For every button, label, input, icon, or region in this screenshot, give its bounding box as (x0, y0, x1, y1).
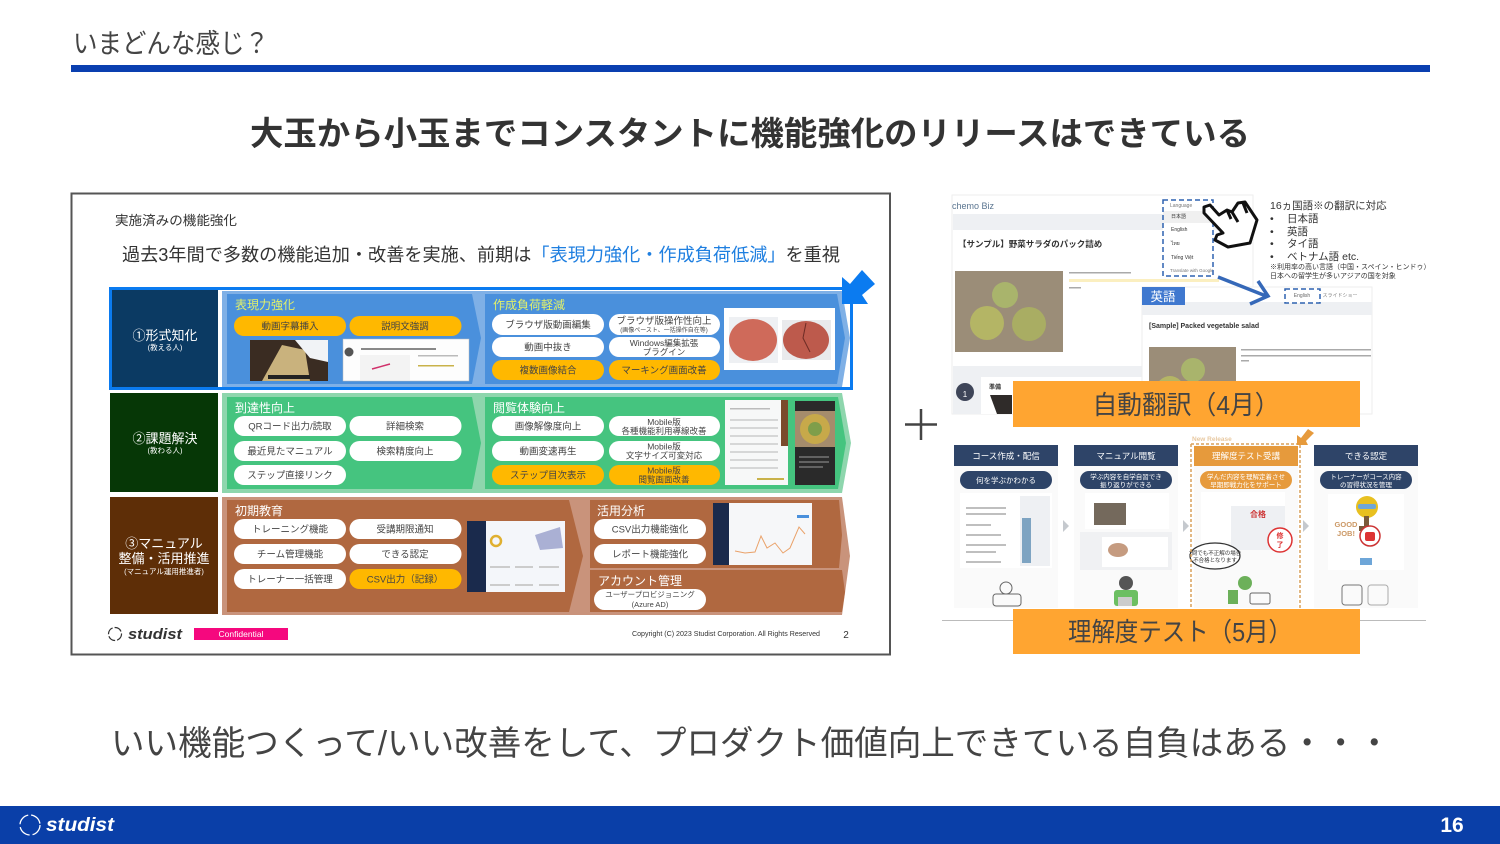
callout: 理解度テスト: 理解度テスト（5月） (1068, 617, 1292, 647)
japanese screenshot: 【サンプル】野菜サラダのパック詰め (958, 239, 1102, 249)
pill: トレーナー一括管理 (247, 574, 333, 586)
icon: pointing hand (1204, 202, 1257, 247)
pill: 文字サイズ可変対応 (626, 450, 703, 460)
panel: comprehension test (942, 429, 1426, 654)
pill (350, 416, 462, 436)
pill: プラグイン (643, 347, 685, 357)
slide number: 2 (843, 630, 849, 641)
pill (609, 465, 720, 485)
translation note: 16ヵ国語※の翻訳に対応 (1270, 199, 1387, 212)
row 1: 形式知化 (111, 289, 850, 388)
language dropdown: Translate with Google (1170, 268, 1214, 273)
section: 初期教育: 初期教育 (235, 503, 283, 518)
step 2: 学ぶ内容を自学自習でき (1090, 472, 1162, 481)
pill: 動画字幕挿入 (261, 320, 319, 332)
panel subheading: 実施済みの機能強化 (115, 213, 237, 228)
pill: 複数画像結合 (519, 364, 577, 376)
pill (350, 519, 462, 539)
row 2 label: (教わる人) (148, 445, 183, 455)
pill: (Azure AD) (632, 600, 669, 609)
arrow: new release marker (1297, 429, 1314, 445)
panel lead sentence: 過去3年間で多数の機能追加・改善を実施、前期は「表現力強化・作成負荷低減」を重視 (122, 245, 840, 265)
pill: 詳細検索 (386, 420, 424, 432)
pill (234, 316, 346, 336)
step 4: GOOD (1335, 520, 1358, 529)
pill (492, 337, 604, 357)
pill: できる認定 (381, 550, 429, 560)
image: phone screenshot (795, 401, 835, 485)
section: 到達性向上 (227, 397, 481, 489)
translation note: ベトナム語 etc. (1287, 251, 1359, 263)
row 3 label (110, 497, 218, 614)
section: 閲覧体験向上: 閲覧体験向上 (493, 400, 565, 415)
pill (234, 441, 346, 461)
row 3 label: ③マニュアル (125, 536, 203, 551)
step 1: コース作成・配信 (972, 451, 1040, 461)
row 1 label (111, 289, 218, 388)
pill: 動画変速再生 (519, 446, 577, 458)
pill (609, 314, 720, 335)
english screenshot: [Sample] Packed vegetable salad (1149, 323, 1259, 330)
pill (350, 441, 462, 461)
step 4: トレーナーがコース内容 (1330, 472, 1402, 481)
japanese screenshot: 準備 (989, 383, 1001, 391)
step 3: 理解度テスト受講 (1212, 451, 1280, 461)
step 2: 振り返りができる (1100, 480, 1152, 489)
panel: auto translation (952, 195, 1431, 427)
japanese screenshot (952, 195, 1253, 414)
pill: 画像解像度向上 (515, 420, 582, 432)
pill: (画像ペースト、一括操作自在等) (620, 326, 708, 334)
step 1: 何を学ぶかわかる (976, 475, 1036, 485)
row 1 label: (教える人) (148, 342, 183, 352)
pill: Mobile版 (647, 466, 681, 476)
row 3 background arrow (222, 497, 850, 615)
speech bubble: 不合格となります (1193, 556, 1237, 564)
pill (234, 416, 346, 436)
step 4: JOB! (1337, 529, 1355, 538)
stamp: 修了: 修 (1276, 531, 1284, 540)
pill: 検索精度向上 (376, 446, 434, 458)
pill (609, 416, 720, 436)
pill: レポート機能強化 (612, 548, 688, 560)
stamp: 修了: 了 (1276, 541, 1284, 549)
pill: Mobile版 (647, 442, 681, 452)
pill (492, 441, 604, 461)
pill: CSV出力機能強化 (612, 524, 689, 536)
pill (492, 360, 604, 380)
pill: ブラウザ版操作性向上 (616, 315, 712, 327)
pill (350, 316, 462, 336)
pill (594, 544, 706, 564)
pill (609, 360, 720, 380)
step 3 (1189, 445, 1298, 608)
stamp: 修了 (1268, 528, 1292, 552)
pill: CSV出力（記録） (367, 574, 443, 586)
row 3 label: (マニュアル運用推進者) (124, 566, 204, 576)
row 2: 課題解決 (110, 393, 851, 493)
translation note: 日本への留学生が多いアジアの国を対象 (1270, 271, 1396, 280)
step 1 (954, 445, 1058, 608)
image: dashboard screenshot (467, 521, 565, 592)
page number: 16 (1440, 814, 1464, 837)
section: 作成負荷軽減: 作成負荷軽減 (493, 297, 565, 312)
slide title: いまどんな感じ？ (73, 29, 269, 59)
translation note: 英語 (1287, 225, 1308, 238)
pill: Windows編集拡張 (630, 338, 699, 348)
title rule (71, 65, 1430, 72)
pill (350, 544, 462, 564)
pill: Mobile版 (647, 417, 681, 427)
label: 英語: 英語 (1150, 290, 1176, 304)
image: macaron comparison (724, 308, 835, 370)
row 1 label: ①形式知化 (132, 328, 198, 343)
language dropdown: ไทย (1170, 240, 1180, 247)
row 3: マニュアル整備・活用推進 (110, 497, 850, 615)
row 2 label (110, 393, 218, 492)
row 1 blue highlight frame (110, 288, 852, 388)
japanese screenshot: chemo Biz (952, 201, 995, 211)
section: アカウント管理: アカウント管理 (598, 573, 682, 588)
speech bubble: 1問でも不正解の場合 (1189, 549, 1242, 557)
section: 閲覧体験向上 (485, 397, 846, 489)
step 4: できる認定 (1345, 451, 1388, 461)
translation note: • (1270, 251, 1274, 263)
pill (492, 416, 604, 436)
label: 英語 (1142, 287, 1185, 305)
confidential tag (194, 628, 288, 640)
slide footer: logo (108, 626, 183, 643)
callout: 自動翻訳 (1013, 381, 1360, 427)
pill: 閲覧画面改善 (638, 474, 690, 484)
step 4 (1314, 445, 1418, 608)
icon: studist logo ring (20, 815, 40, 835)
pill (609, 337, 720, 357)
section: 作成負荷軽減 (485, 294, 845, 384)
section: アカウント管理 (590, 570, 845, 612)
translation note: • (1270, 238, 1274, 250)
row 3 label: 整備・活用推進 (118, 551, 210, 566)
footer logo text: studist (46, 815, 115, 836)
image: analytics chart screenshot (713, 503, 812, 565)
pill (234, 519, 346, 539)
pill: 動画中抜き (524, 342, 572, 354)
pill: ブラウザ版動画編集 (505, 319, 591, 331)
pill: チーム管理機能 (257, 548, 324, 560)
pill: ステップ目次表示 (510, 470, 586, 482)
pill: ステップ直接リンク (247, 470, 333, 482)
step 3: 早期即戦力化をサポート (1210, 480, 1282, 489)
panel: embedded feature slide (72, 194, 890, 654)
image: table of contents screenshot (725, 400, 788, 485)
row 2 label: ②課題解決 (132, 431, 198, 446)
pill: 最近見たマニュアル (247, 446, 333, 458)
language dropdown: 日本語 (1171, 213, 1186, 220)
speech bubble (1189, 543, 1242, 569)
pill (609, 441, 720, 461)
pill (234, 544, 346, 564)
translation note (1270, 199, 1431, 280)
copyright: Copyright (C) 2023 Studist Corporation. All Rights Reserved (632, 631, 820, 638)
arrow: japanese to english (1218, 277, 1268, 304)
new release dashed frame: New Release (1192, 436, 1232, 443)
step arrows (1063, 520, 1309, 532)
step 4: の習得状況を管理 (1340, 480, 1392, 489)
confidential tag: Confidential (219, 629, 264, 639)
pill: QRコード出力/読取 (248, 420, 332, 432)
row 1 background arrow (222, 291, 850, 387)
english screenshot: スライドショー (1322, 293, 1358, 299)
translation note: • (1270, 226, 1274, 238)
section: 表現力強化: 表現力強化 (235, 298, 295, 312)
translation note: 日本語 (1287, 212, 1319, 225)
language dropdown: English (1171, 227, 1188, 233)
step 3: 合格 (1250, 509, 1266, 519)
new release dashed frame (1191, 436, 1300, 610)
pill (234, 569, 346, 589)
pill: 説明文強調 (381, 320, 429, 332)
translation note: タイ語 (1287, 238, 1319, 250)
language dropdown: Language (1170, 203, 1192, 209)
pill (492, 465, 604, 485)
section: 到達性向上: 到達性向上 (235, 400, 295, 415)
slide footer: logo: studist (128, 626, 183, 643)
section: 初期教育 (227, 500, 583, 612)
icon: blue corner ribbon (842, 270, 875, 304)
step 2 (1074, 445, 1178, 608)
pill: トレーニング機能 (252, 524, 328, 536)
english screenshot: English (1294, 293, 1310, 299)
japanese screenshot: 1 (963, 390, 968, 399)
pill (594, 589, 706, 610)
image: screenshot with arrow (343, 339, 469, 381)
language dropdown: Tiếng Việt (1171, 255, 1194, 261)
callout: 理解度テスト (1013, 609, 1360, 654)
pill: ユーザープロビジョニング (605, 589, 695, 599)
row 2 background arrow (222, 393, 851, 493)
step 3: 学んだ内容を理解定着させ (1207, 472, 1285, 481)
callout: 自動翻訳: 自動翻訳（4月） (1092, 390, 1280, 420)
translation note: ※利用率の高い言語（中国・スペイン・ヒンドゥ） (1270, 262, 1431, 271)
divider line (942, 620, 1426, 621)
language dropdown (1163, 200, 1214, 277)
pill (492, 314, 604, 335)
step 2: マニュアル閲覧 (1096, 451, 1156, 461)
pill: 受講期限通知 (376, 524, 434, 536)
section: 表現力強化 (227, 294, 481, 384)
footer bar (0, 806, 1500, 844)
pill (234, 465, 346, 485)
section: 活用分析 (590, 500, 842, 568)
main heading: 大玉から小玉までコンスタントに機能強化のリリースはできている (250, 115, 1250, 152)
image: video still (250, 340, 328, 381)
english screenshot (1142, 287, 1372, 414)
translation note: • (1270, 213, 1274, 225)
section: 活用分析: 活用分析 (597, 504, 645, 518)
pill: 各種機能利用導線改善 (621, 426, 707, 436)
pill (350, 569, 462, 589)
plus sign (905, 409, 937, 440)
pill: マーキング画面改善 (621, 364, 707, 376)
bottom statement: いい機能つくって/いい改善をして、プロダクト価値向上できている自負はある・・・ (111, 725, 1391, 763)
pill (594, 519, 706, 539)
